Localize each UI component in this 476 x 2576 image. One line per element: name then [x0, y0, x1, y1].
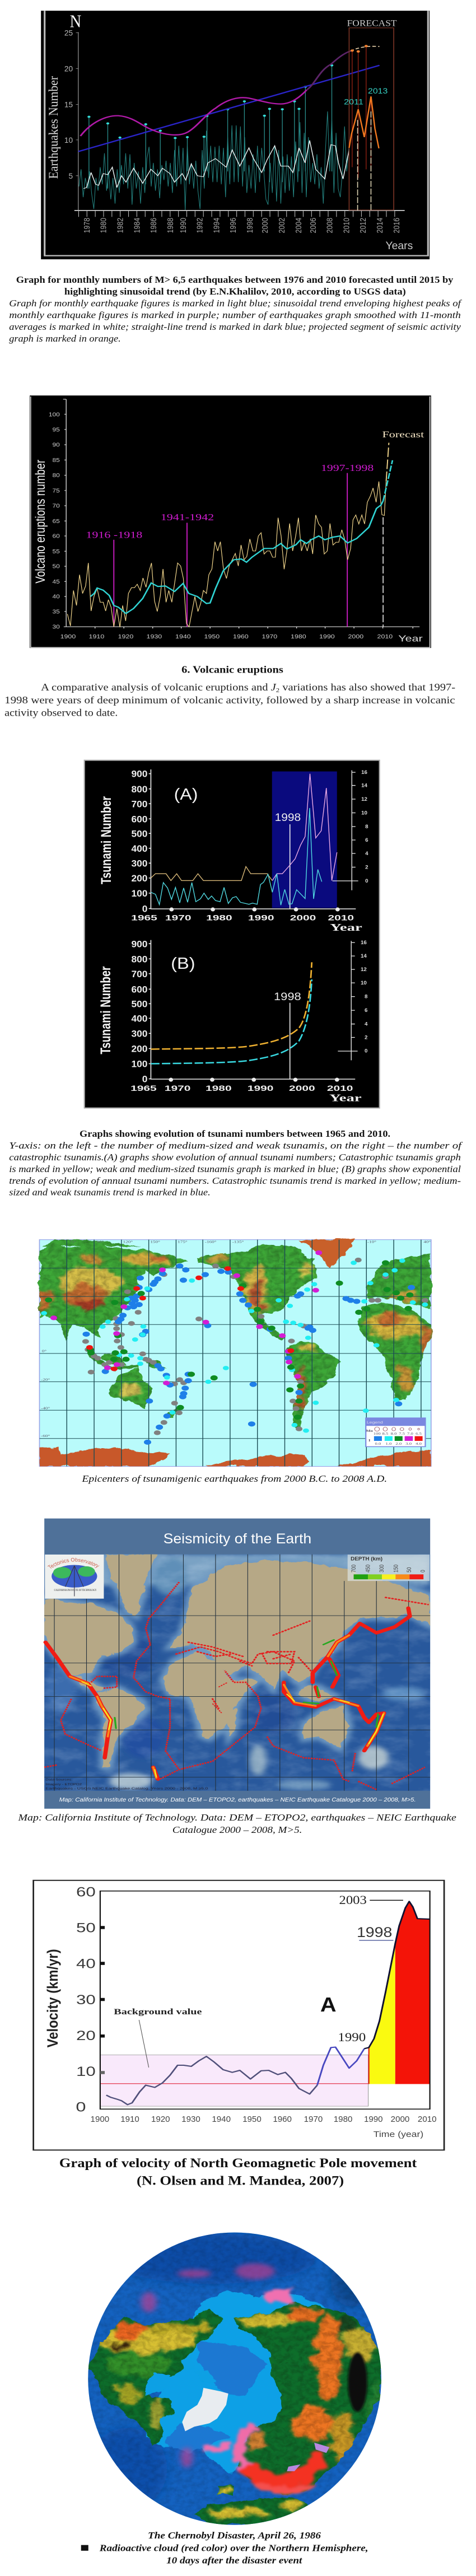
y axis with labels: 30 [53, 624, 60, 630]
Arctic ocean basin and shelf in light blue [143, 2292, 328, 2474]
minimum markers in magenta [86, 463, 374, 627]
graph B x axis labels: 1970 [165, 1084, 190, 1093]
grid labels: -160° [205, 1240, 216, 1244]
continents [44, 1555, 430, 1767]
graph B year label: Year [329, 1093, 362, 1104]
background value callout: Background value [114, 2007, 202, 2016]
graph B x axis labels [130, 1080, 353, 1093]
grid labels: -40° [41, 1406, 50, 1410]
y axis with labels: 55 [53, 549, 60, 555]
legend: 8.5 [382, 1431, 389, 1436]
graph A left axes [132, 769, 356, 914]
graph A catastrophic tsunamis line [151, 774, 337, 880]
y axis with ticks: 10 [64, 136, 73, 144]
x axis title: Year [398, 633, 423, 643]
graph B y title: Tsunami Number [98, 966, 114, 1054]
x axis with years: 1984 [133, 218, 142, 233]
graph A left axes: 100 [132, 888, 147, 899]
11-month smoothed line in white [83, 141, 349, 189]
text block: volcanic activity analysis: 1998 were years of deep minimum of volcanic activity, followed by a sharp increase in volcanic [4, 695, 455, 706]
y axis with labels: 40 [53, 594, 60, 600]
graph A left axes: 200 [132, 873, 147, 884]
graph B right axis: 16 [361, 940, 367, 946]
yellow 1990-1998 area [369, 1943, 395, 2084]
caption: earthquake graph [9, 274, 463, 344]
graph B left axes: 200 [132, 1044, 147, 1054]
data source note: Earthquakes - USGS NEIC Earthquake Catalog, Years 2000 - 2008, M ≥5.0 [45, 1787, 208, 1790]
red 1998-2010 area [395, 1901, 430, 2084]
depth legend: DEPTH (km) [351, 1556, 382, 1562]
minimum markers in magenta: 1997-1998 [321, 463, 374, 474]
graph A x axis labels: 1990 [248, 914, 274, 922]
grid labels: 40° [423, 1240, 431, 1244]
caption: tsunami graphs: catastrophic tsunamis.(A) graphs show evolution of annual tsunami numbers; Catastrophic tsunamis graph [9, 1151, 461, 1163]
caption: velocity graph [59, 2156, 417, 2188]
continents with relief [37, 1239, 433, 1428]
ocean and relief [44, 1555, 430, 1791]
caption: Chernobyl disaster: Radioactive cloud (red color) over the Northern Hemisphere, [99, 2543, 368, 2554]
grid labels: -10° [367, 1240, 376, 1244]
forecast label: Forecast [382, 429, 424, 439]
axis title N: N [70, 12, 81, 31]
peak markers on monthly line [89, 66, 332, 189]
scattered continental earthquakes [176, 1598, 428, 1708]
graph B right axis: 6 [365, 1007, 367, 1014]
2003 label with leader: 2003 [339, 1893, 367, 1907]
graph B right axis: 4 [365, 1021, 368, 1028]
legend: 2.0 [395, 1441, 402, 1446]
caption: tsunami graphs: is marked in yellow; weak and medium-sized tsunamis graph is marked in blue; (B) graphs show exponential [9, 1163, 461, 1175]
caption: seismicity map [18, 1812, 456, 1835]
graph B 1998 marker: 1998 [274, 991, 301, 1003]
x axis with years: 1970 [262, 634, 277, 640]
legend: Legend [367, 1420, 383, 1425]
graph B left axes: 400 [132, 1014, 147, 1024]
Antarctica [39, 1447, 431, 1467]
legend: Mo [366, 1429, 373, 1433]
x axis with years: 2014 [375, 218, 385, 233]
graph B right axis: 10 [361, 980, 367, 986]
subduction zones in red, orange, yellow and green [45, 1608, 410, 1779]
y axis labels and ticks: 20 [76, 2028, 96, 2043]
x axis title Years: Years [385, 240, 413, 251]
x axis with years: 1930 [147, 634, 162, 640]
x axis with years: 2010 [342, 218, 351, 233]
y axis with labels: 95 [53, 427, 60, 433]
legend: I [368, 1438, 371, 1442]
x axis labels: 1920 [151, 2114, 170, 2124]
graph A left axes: 700 [132, 799, 147, 809]
x axis with years: 1996 [229, 218, 238, 233]
graph A year label: Year [330, 922, 362, 934]
graph B left axes: 700 [132, 969, 147, 979]
x axis labels: 1910 [120, 2114, 139, 2124]
x axis with years: 1980 [291, 634, 306, 640]
chart: monthly earthquakes 1976-2010 with forecast [41, 11, 430, 259]
grid lines [44, 1555, 430, 1791]
grid labels [41, 1240, 431, 1438]
x axis labels: 2010 [418, 2114, 437, 2124]
x axis with years: 1988 [166, 218, 175, 233]
graph B title: (B) [171, 955, 195, 973]
depth legend: 0 [419, 1570, 427, 1572]
y axis labels and ticks: 40 [76, 1957, 96, 1971]
caption: earthquake graph: graph is marked in orange. [9, 333, 121, 344]
graph A left axes: 600 [132, 814, 147, 824]
graph A right axis: 2 [365, 865, 368, 870]
minimum markers in magenta: 1916 -1918 [86, 530, 142, 540]
legend: 0.0 [375, 1441, 381, 1446]
legend: 100 [374, 1431, 381, 1436]
graph B right axis: 12 [361, 967, 367, 973]
y axis with ticks [64, 29, 78, 211]
graph B right axis: 0 [365, 1048, 367, 1054]
faint cloud streaks over oceans [141, 2264, 275, 2468]
x axis with years: 1992 [195, 218, 204, 233]
x axis with years: 1994 [212, 218, 221, 233]
Greenland [299, 1240, 356, 1268]
y axis title: Volcano eruptions number [32, 460, 48, 584]
label 2013: 2013 [368, 87, 388, 96]
inland water [144, 2355, 216, 2395]
grid labels: -20° [41, 1378, 50, 1382]
graph A x axis labels: 2010 [328, 914, 354, 922]
graph A title: (A) [174, 786, 198, 804]
caption: Chernobyl disaster: 10 days after the disaster event [166, 2555, 303, 2566]
x axis labels: 1970 [304, 2114, 323, 2124]
y axis with labels: 100 [49, 412, 60, 418]
x axis with years: 2012 [359, 218, 368, 233]
Tectonics Observatory logo [45, 1555, 104, 1599]
graph A left axes: 900 [132, 769, 147, 780]
depth legend: 450 [365, 1564, 372, 1572]
projected orange forecast segment [349, 46, 379, 211]
grid labels: 75° [69, 1240, 76, 1244]
x axis with years: 1980 [99, 218, 108, 233]
x axis with years [74, 211, 405, 233]
lilac patches [287, 2443, 329, 2471]
map: seismicity of the Earth [44, 1519, 430, 1809]
graph A x axis labels: 2000 [290, 914, 316, 922]
depth legend: 700 [351, 1564, 357, 1572]
graph A left axes: 500 [132, 829, 147, 839]
annual eruptions line in yellow [67, 481, 386, 627]
x axis with years: 2010 [377, 634, 393, 640]
grid labels: 90° [96, 1240, 104, 1244]
grid labels: 175° [178, 1240, 188, 1244]
legend: 8.0 [391, 1431, 397, 1436]
x axis labels: 1980 [334, 2114, 352, 2124]
x axis with years: 2006 [309, 218, 318, 233]
x axis labels: 1950 [242, 2114, 262, 2124]
depth legend [348, 1555, 430, 1581]
y axis with ticks: 5 [69, 172, 73, 180]
legend: 4.0 [416, 1441, 422, 1446]
y axis labels and ticks: 50 [76, 1920, 96, 1935]
legend: 1.0 [385, 1441, 392, 1446]
graph A left axes: 300 [132, 858, 147, 869]
x axis title: Time (year) [374, 2130, 423, 2139]
text block: volcanic activity analysis: 2 [276, 687, 279, 694]
text block: volcanic activity analysis: A comparative analysis of volcanic eruptions and J [41, 683, 276, 693]
black high relief [348, 2353, 367, 2412]
graph A right axis: 6 [365, 837, 368, 843]
y axis with labels: 80 [53, 473, 60, 479]
x axis with years: 2002 [277, 218, 286, 233]
graph A right axis [333, 769, 368, 890]
x axis with years: 2016 [392, 218, 401, 233]
text block: volcanic activity analysis: activity observed to date. [4, 708, 118, 718]
graph B left axes: 100 [132, 1059, 147, 1069]
graph B left axes [132, 939, 355, 1085]
caption: tsunami graphs: trends of evolution of annual tsunami numbers. Catastrophic tsunamis trend is marked in yellow; medium- [9, 1175, 461, 1186]
graph A weak and medium tsunamis line [151, 808, 322, 905]
monthly earthquake line in light blue [79, 111, 349, 210]
graph B left axes: 500 [132, 999, 147, 1009]
y axis title: Velocity (km/yr) [45, 1949, 62, 2047]
x axis with years: 1990 [319, 634, 335, 640]
1998 label with underline: 1998 [357, 1925, 392, 1940]
graph A right axis: 8 [365, 824, 368, 830]
y axis with labels: 60 [53, 534, 60, 539]
graph A left axes: 800 [132, 784, 147, 795]
graph A y title: Tsunami Number [99, 796, 114, 884]
x axis labels: 1940 [212, 2114, 231, 2124]
heading: 6. Volcanic eruptions: 6. Volcanic eruptions [181, 665, 283, 675]
graph B left axes: 0 [142, 1074, 147, 1085]
graph A 1998 marker: 1998 [275, 811, 301, 824]
caption: tsunami graphs [9, 1128, 464, 1198]
graph B left axes: 800 [132, 954, 147, 964]
label 2011: 2011 [344, 98, 363, 106]
caption: epicenters map: Epicenters of tsunamigenic earthquakes from 2000 B.C. to 2008 A.D. [81, 1473, 387, 1484]
text block: volcanic activity analysis: variations has also showed that 1997- [279, 683, 455, 693]
graph B x axis labels: 1980 [206, 1084, 232, 1093]
y axis labels and ticks: 0 [76, 2100, 86, 2115]
grid labels: 150° [150, 1240, 160, 1244]
graph B left axes: 300 [132, 1029, 147, 1039]
graph A right axis: 0 [365, 878, 368, 884]
deep ocean tone [88, 2234, 374, 2510]
graph A right axis: 16 [361, 769, 367, 776]
graph A right axis: 4 [365, 851, 368, 857]
x axis with years: 1910 [89, 634, 104, 640]
map: epicenters of tsunamigenic earthquakes [39, 1240, 432, 1467]
smoothed eruptions line in cyan [91, 501, 383, 614]
x axis with years: 1940 [175, 634, 191, 640]
graph B x axis labels: 1990 [248, 1084, 273, 1093]
graph B x axis labels: 2000 [289, 1084, 315, 1093]
graph B right axis: 2 [365, 1035, 367, 1041]
x axis labels: 1990 [364, 2114, 383, 2124]
data source note [45, 1778, 208, 1790]
x axis with years: 2000 [348, 634, 363, 640]
x axis with years: 1998 [245, 218, 254, 233]
x axis with years [60, 627, 419, 640]
data source note: Imagery - ETOPO2 [45, 1783, 82, 1786]
caption: tsunami graphs: sized and weak tsunamis trend is marked in blue. [9, 1187, 211, 1198]
minimum markers in magenta: 1941-1942 [161, 512, 214, 522]
graph B x axis labels: 1965 [130, 1084, 157, 1093]
grid labels: -135° [232, 1240, 244, 1244]
y axis with ticks: 20 [64, 64, 73, 73]
background value callout [114, 2007, 202, 2068]
graph B left axes: 600 [132, 984, 147, 995]
x axis with years: 1982 [116, 218, 125, 233]
y axis with labels: 35 [53, 609, 60, 615]
graph A right axis: 12 [361, 796, 367, 802]
y axis labels and ticks [76, 1885, 105, 2115]
2003 label with leader [339, 1893, 403, 1907]
Tectonics Observatory logo: CALIFORNIA INSTITUTE OF TECHNOLOGY [54, 1589, 97, 1592]
y axis with labels: 85 [53, 458, 60, 464]
graph B right axis [338, 940, 368, 1060]
graph B exponential trends [151, 962, 312, 1063]
graph A right axis: 10 [361, 810, 367, 816]
caption: velocity graph: (N. Olsen and M. Mandea, 2007) [137, 2173, 344, 2188]
x axis labels: 1900 [91, 2114, 109, 2124]
x axis labels [91, 2114, 437, 2124]
y axis with labels: 45 [53, 579, 60, 585]
y axis with labels: 70 [53, 503, 60, 509]
grid labels: -60° [41, 1434, 50, 1438]
radioactive cloud in red [208, 2288, 316, 2491]
x axis labels: 2000 [391, 2114, 409, 2124]
y axis with labels [49, 399, 66, 630]
map title: Seismicity of the Earth [164, 1531, 311, 1547]
grid labels: 0° [42, 1349, 46, 1353]
y axis with labels: 75 [53, 488, 60, 494]
graph A left axes: 400 [132, 843, 147, 854]
y axis with ticks: 25 [64, 29, 73, 38]
y axis labels and ticks: 60 [76, 1885, 96, 1900]
map footer note: Map: California Institute of Technology. Data: DEM – ETOPO2, earthquakes – NEIC Earthquake Catalogue 2000 – 2008, M>5. [59, 1796, 416, 1803]
y axis with ticks: 15 [64, 100, 73, 109]
straight-line trend in dark blue [78, 66, 380, 152]
graph B right axis: 8 [365, 994, 367, 1000]
depth legend: 300 [379, 1564, 386, 1572]
legend: 7.0 [407, 1431, 413, 1436]
background red level line [100, 2083, 430, 2085]
Tectonics Observatory logo: Tectonics Observatory [47, 1558, 100, 1569]
data source note: Data Sources: [45, 1778, 72, 1781]
caption: Chernobyl disaster: The Chernobyl Disaster, April 26, 1986 [148, 2531, 321, 2541]
graph A x axis labels: 1965 [131, 914, 157, 922]
chart: volcanic eruptions number [30, 395, 431, 648]
x axis with years: 1986 [149, 218, 158, 233]
x axis with years: 2000 [260, 218, 270, 233]
forecast box and title [347, 18, 397, 210]
chart: velocity of North Geomagnetic Pole [34, 1880, 444, 2150]
graph A x axis labels [131, 909, 354, 922]
graph B right axis: 14 [361, 953, 367, 959]
graph A left axes: 0 [142, 904, 147, 914]
y axis with labels: 90 [53, 442, 60, 448]
x axis labels: 1930 [181, 2114, 200, 2124]
x axis with years: 2008 [325, 218, 334, 233]
sinusoidal trend in purple [81, 46, 380, 136]
text block: volcanic activity analysis [4, 683, 455, 718]
legend [365, 1417, 426, 1447]
y axis labels and ticks: 10 [76, 2064, 96, 2079]
grid lines [39, 1240, 431, 1467]
globe: Chernobyl radioactive cloud over the Northern Hemisphere [85, 2233, 385, 2526]
caption: tsunami graphs: Y-axis: on the left - the number of medium-sized and weak tsunamis, on the right – the number of [9, 1140, 464, 1151]
highlighted blue region [272, 772, 337, 908]
caption: Chernobyl disaster [81, 2531, 368, 2566]
ridge earthquakes [44, 1582, 425, 1790]
legend: 6.5 [416, 1431, 422, 1436]
graph A x axis labels: 1970 [165, 914, 192, 922]
x axis with years: 1960 [233, 634, 249, 640]
depth legend: 50 [406, 1567, 413, 1572]
y axis title: Earthquakes Number [46, 76, 61, 179]
background value band [100, 2055, 368, 2106]
graph A x axis labels: 1980 [206, 914, 232, 922]
Greenland ice [182, 2388, 228, 2431]
chart panel: tsunami numbers A and B [85, 760, 380, 1108]
grid labels: 120° [123, 1240, 133, 1244]
x axis labels: 1960 [273, 2114, 292, 2124]
y axis with labels: 65 [53, 519, 60, 525]
graph B left axes: 900 [132, 939, 147, 949]
forecast dashed segments [383, 443, 393, 627]
plot frame [100, 1891, 430, 2109]
forecast box and title: FORECAST [347, 18, 397, 28]
y axis labels and ticks: 30 [76, 1992, 96, 2008]
bullet square [81, 2545, 88, 2551]
caption: tsunami graphs: Graphs showing evolution of tsunami numbers between 1965 and 2010. [80, 1128, 390, 1139]
x axis with years: 1900 [60, 634, 76, 640]
caption: seismicity map: Catalogue 2000 – 2008, M>5. [172, 1824, 302, 1835]
land masses [85, 2298, 385, 2526]
y axis with labels: 50 [53, 564, 60, 570]
graph A right axis: 14 [361, 783, 368, 789]
x axis with years: 1978 [82, 218, 91, 233]
graph B x axis labels: 2010 [327, 1084, 353, 1093]
x axis with years: 1920 [118, 634, 133, 640]
label A: A [320, 1993, 337, 2016]
epicenter markers [44, 1253, 425, 1442]
x axis with years: 1990 [179, 218, 188, 233]
depth legend: 150 [393, 1564, 400, 1572]
x axis with years: 2004 [294, 218, 303, 233]
x axis with years: 1950 [204, 634, 220, 640]
1990 label: 1990 [338, 2030, 366, 2044]
legend: 3.0 [405, 1441, 412, 1446]
shallow shelves [44, 1555, 430, 1767]
legend: 7.5 [399, 1431, 405, 1436]
velocity curve [106, 1901, 430, 2104]
